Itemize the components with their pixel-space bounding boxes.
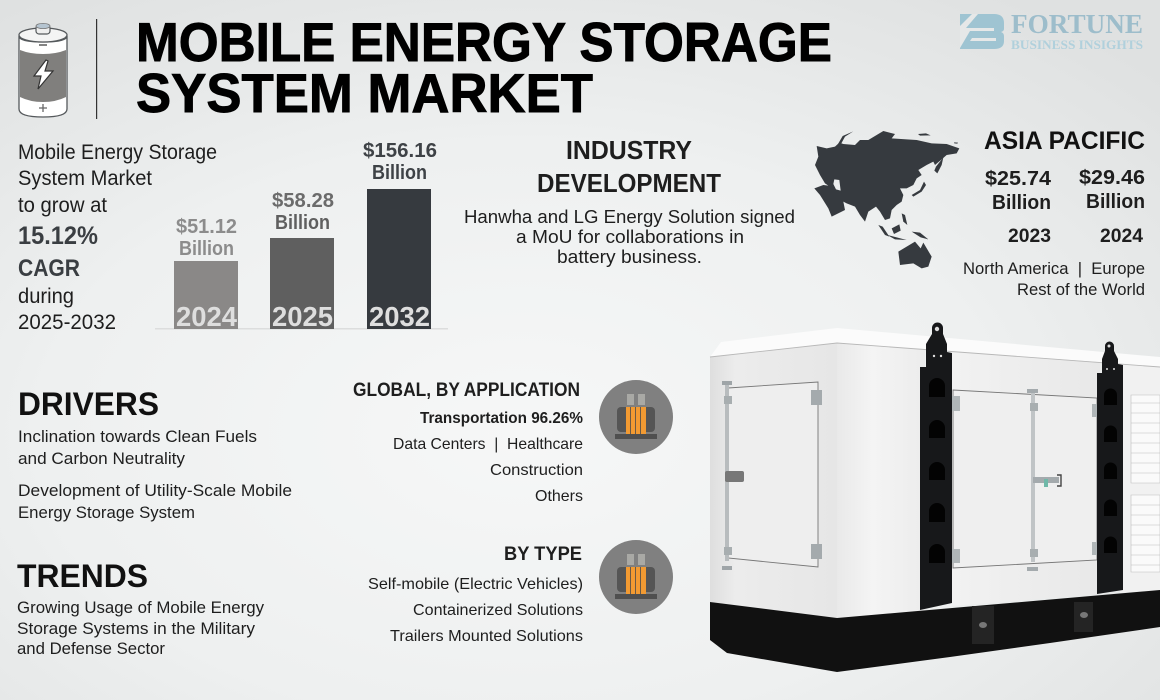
door right	[948, 389, 1102, 571]
bar 2024: $51.12	[176, 216, 237, 238]
text: CAGR summary: Mobile Energy Storage	[18, 141, 217, 164]
bar 2024: 2024	[176, 301, 237, 332]
panel: drivers: DRIVERS	[18, 386, 159, 422]
panel: Asia Pacific values: Billion	[992, 191, 1051, 214]
front wall	[837, 343, 925, 618]
lifting post left	[920, 322, 952, 610]
text: CAGR summary: 2025-2032	[18, 311, 116, 334]
panel: Asia Pacific values: 2023	[1008, 226, 1051, 247]
icon: transformer (application)	[599, 380, 673, 454]
bar 2025: Billion	[275, 212, 330, 234]
title	[136, 11, 832, 124]
bar 2032	[363, 140, 437, 332]
panel: global by application: Data Centers | Healthcare	[393, 436, 583, 453]
panel: by type: BY TYPE	[504, 544, 582, 565]
lifting post right	[1097, 342, 1123, 594]
text: CAGR summary: during	[18, 285, 74, 308]
icon: battery	[19, 23, 67, 117]
bar 2032: $156.16	[363, 140, 437, 162]
bar 2024	[174, 216, 238, 332]
panel: drivers: Inclination towards Clean Fuels	[18, 427, 257, 446]
text: CAGR summary: CAGR	[18, 255, 80, 282]
panel: global by application: Construction	[490, 462, 583, 479]
title: SYSTEM MARKET	[136, 62, 593, 124]
panel: industry development: Hanwha and LG Energy Solution signed	[464, 206, 795, 227]
bar 2032: Billion	[372, 162, 427, 184]
bar 2025: $58.28	[272, 190, 334, 212]
panel: Asia Pacific values: 2024	[1100, 226, 1143, 247]
panel: industry development	[464, 135, 795, 267]
panel: Asia Pacific values: North America | Europe	[963, 260, 1145, 278]
panel: Asia Pacific values: Billion	[1086, 190, 1145, 213]
panel: industry development: INDUSTRY	[566, 135, 692, 165]
panel: Asia Pacific values: $29.46	[1079, 166, 1145, 189]
panel: Asia Pacific values	[963, 127, 1145, 299]
panel: by type: Self-mobile (Electric Vehicles)	[368, 576, 583, 593]
bar 2024: Billion	[179, 238, 234, 260]
panel: Asia Pacific values: ASIA PACIFIC	[984, 127, 1145, 155]
bar 2032: 2032	[369, 301, 430, 332]
panel: by type: Containerized Solutions	[413, 602, 583, 619]
bar 2025: 2025	[272, 301, 333, 332]
text: CAGR summary: to grow at	[18, 194, 107, 217]
panel: global by application	[353, 380, 583, 505]
panel: global by application: Others	[535, 488, 583, 505]
divider	[96, 19, 97, 119]
panel: industry development: battery business.	[557, 246, 702, 267]
map: Asia Pacific	[814, 131, 959, 268]
panel: Asia Pacific values: $25.74	[985, 167, 1052, 190]
logo: Fortune Business Insights: FORTUNE	[1011, 9, 1143, 39]
panel: drivers	[18, 386, 292, 522]
panel: trends: TRENDS	[17, 558, 148, 594]
panel: drivers: and Carbon Neutrality	[18, 449, 185, 468]
panel: industry development: DEVELOPMENT	[537, 168, 721, 198]
panel: trends: Growing Usage of Mobile Energy	[17, 598, 264, 617]
panel: drivers: Development of Utility-Scale Mobile	[18, 481, 292, 500]
louvers	[1131, 395, 1160, 572]
panel: Asia Pacific values: Rest of the World	[1017, 281, 1145, 299]
text: CAGR summary	[18, 141, 217, 334]
panel: trends: Storage Systems in the Military	[17, 619, 256, 638]
text: CAGR summary: 15.12%	[18, 222, 98, 250]
door left	[722, 381, 822, 570]
panel: industry development: a MoU for collaborations in	[516, 226, 744, 247]
side wall	[710, 343, 837, 618]
panel: global by application: Transportation 96.26%	[420, 410, 583, 427]
logo: Fortune Business Insights	[960, 9, 1143, 52]
roof	[710, 328, 1160, 368]
panel: trends	[17, 558, 264, 658]
title: MOBILE ENERGY STORAGE	[136, 11, 832, 73]
panel: global by application: GLOBAL, BY APPLICATION	[353, 380, 580, 401]
logo: Fortune Business Insights: BUSINESS INSIGHTS	[1011, 37, 1143, 52]
text: CAGR summary: System Market	[18, 167, 152, 190]
icon: transformer (type)	[599, 540, 673, 614]
base	[710, 590, 1160, 672]
panel: drivers: Energy Storage System	[18, 503, 195, 522]
illustration: mobile energy storage container	[710, 322, 1160, 672]
panel: by type	[368, 544, 583, 645]
panel: trends: and Defense Sector	[17, 639, 165, 658]
bar 2025	[270, 190, 334, 332]
bar chart: market size	[155, 140, 448, 332]
panel: by type: Trailers Mounted Solutions	[390, 628, 583, 645]
